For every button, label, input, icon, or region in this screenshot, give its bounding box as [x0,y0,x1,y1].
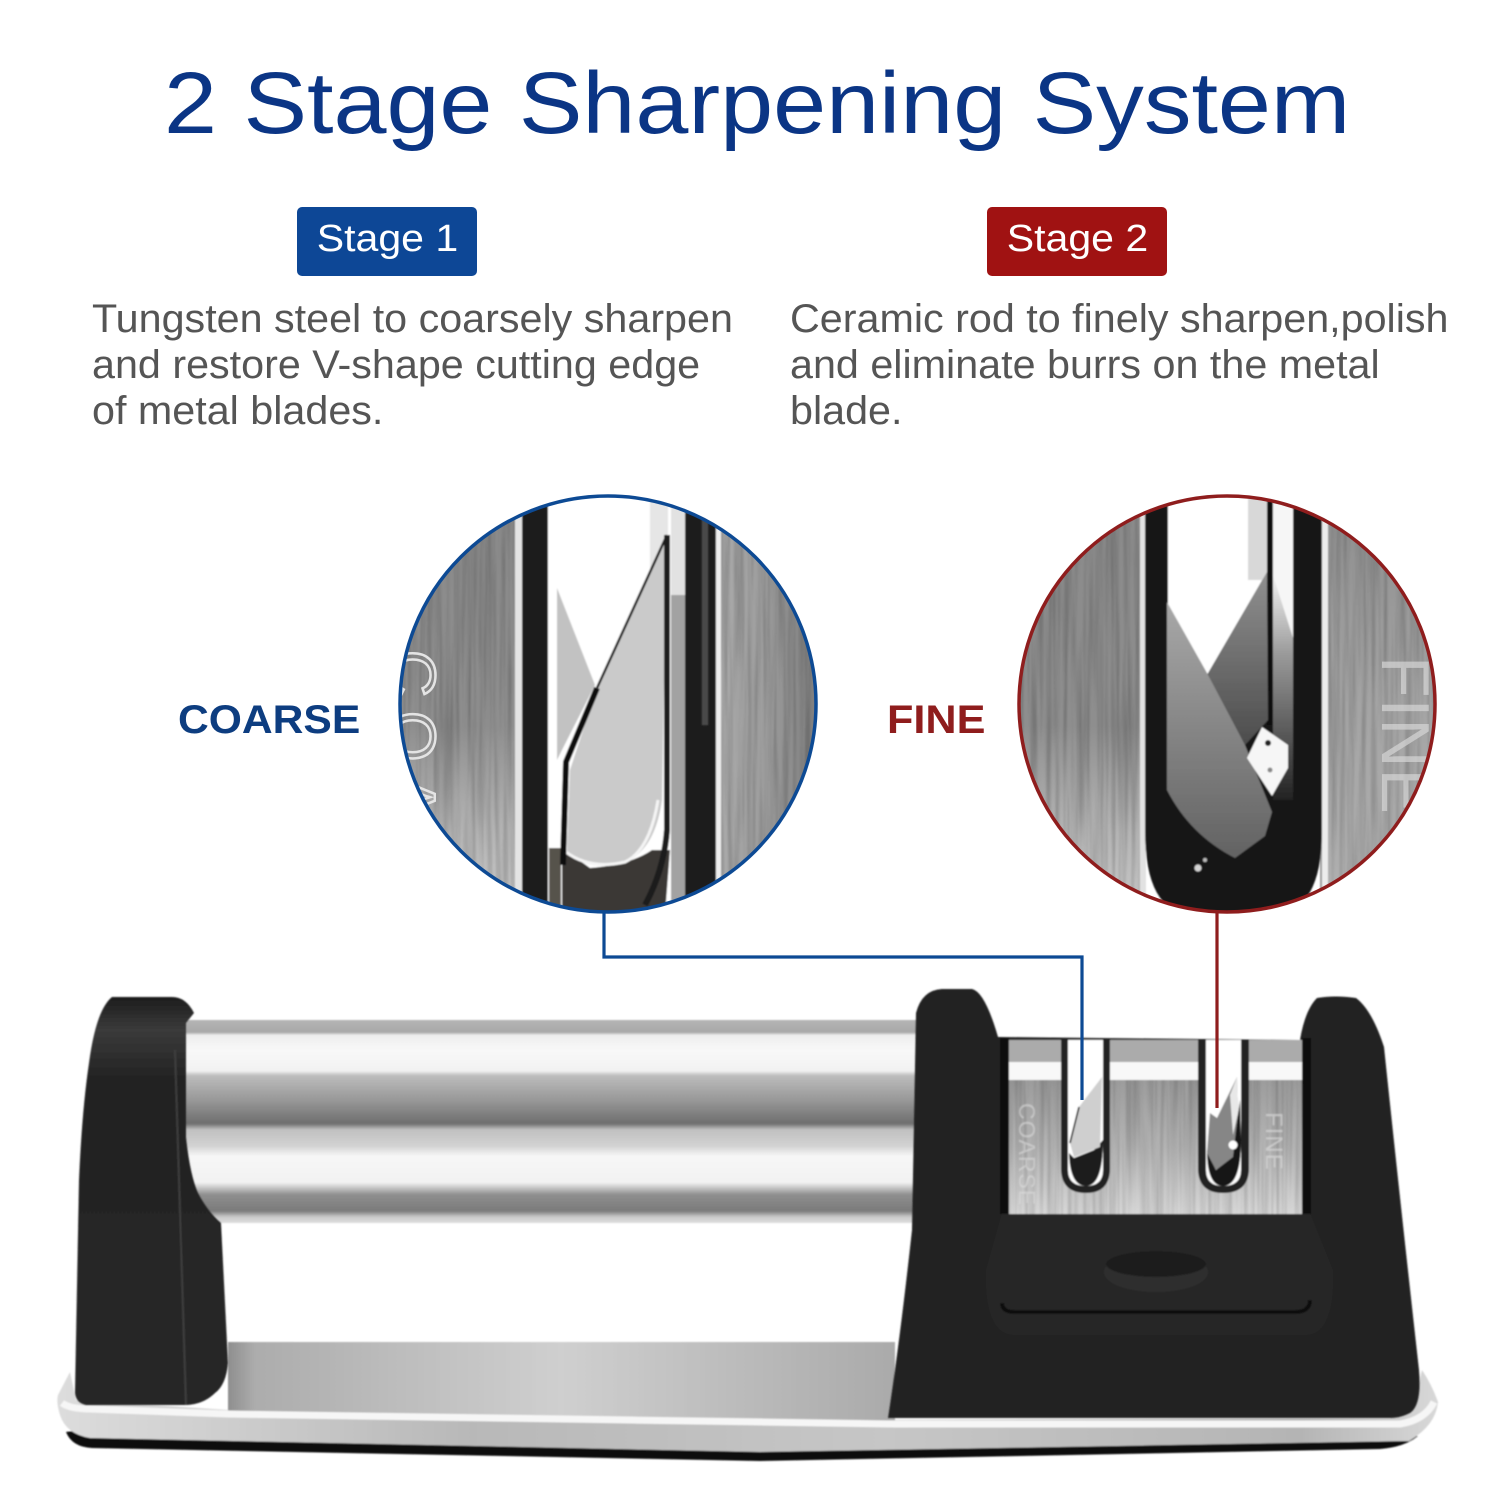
zoom circle: fine slot [1016,495,1443,915]
text: stage 1 description: of metal blades. [92,389,383,433]
left foot [75,997,228,1405]
steel handle rod [180,1020,925,1223]
connector line: fine [1215,912,1219,1108]
title: 2 Stage Sharpening System [164,55,1350,152]
sharpener head [888,989,1420,1418]
slot labels: COARSE [1014,1103,1040,1206]
label: fine: FINE [887,698,985,742]
base plate [57,1342,1438,1461]
connector line: coarse [604,912,1082,1100]
badge: stage 1: Stage 1 [316,218,458,260]
text: stage 2 description [790,297,1448,433]
badge: stage 2: Stage 2 [1006,218,1148,260]
badge: stage 1 [297,207,477,276]
embossed letters FINE: FINE [1367,656,1443,815]
sharpener head: FINE [1260,1112,1287,1171]
text: stage 2 description: Ceramic rod to finely sharpen,polish [790,297,1448,341]
finger grip [1104,1252,1208,1292]
text: stage 1 description: and restore V-shape cutting edge [92,343,700,387]
product and zoom illustration [57,494,1438,1462]
zoom circle: coarse slot [376,495,820,915]
text: stage 1 description: Tungsten steel to coarsely sharpen [92,297,733,341]
text: stage 2 description: blade. [790,389,902,433]
text: stage 1 description [92,297,733,433]
text: stage 2 description: and eliminate burrs on the metal [790,343,1380,387]
badge: stage 2 [987,207,1167,276]
embossed letters COA: COA [376,650,449,833]
label: coarse: COARSE [178,698,360,742]
